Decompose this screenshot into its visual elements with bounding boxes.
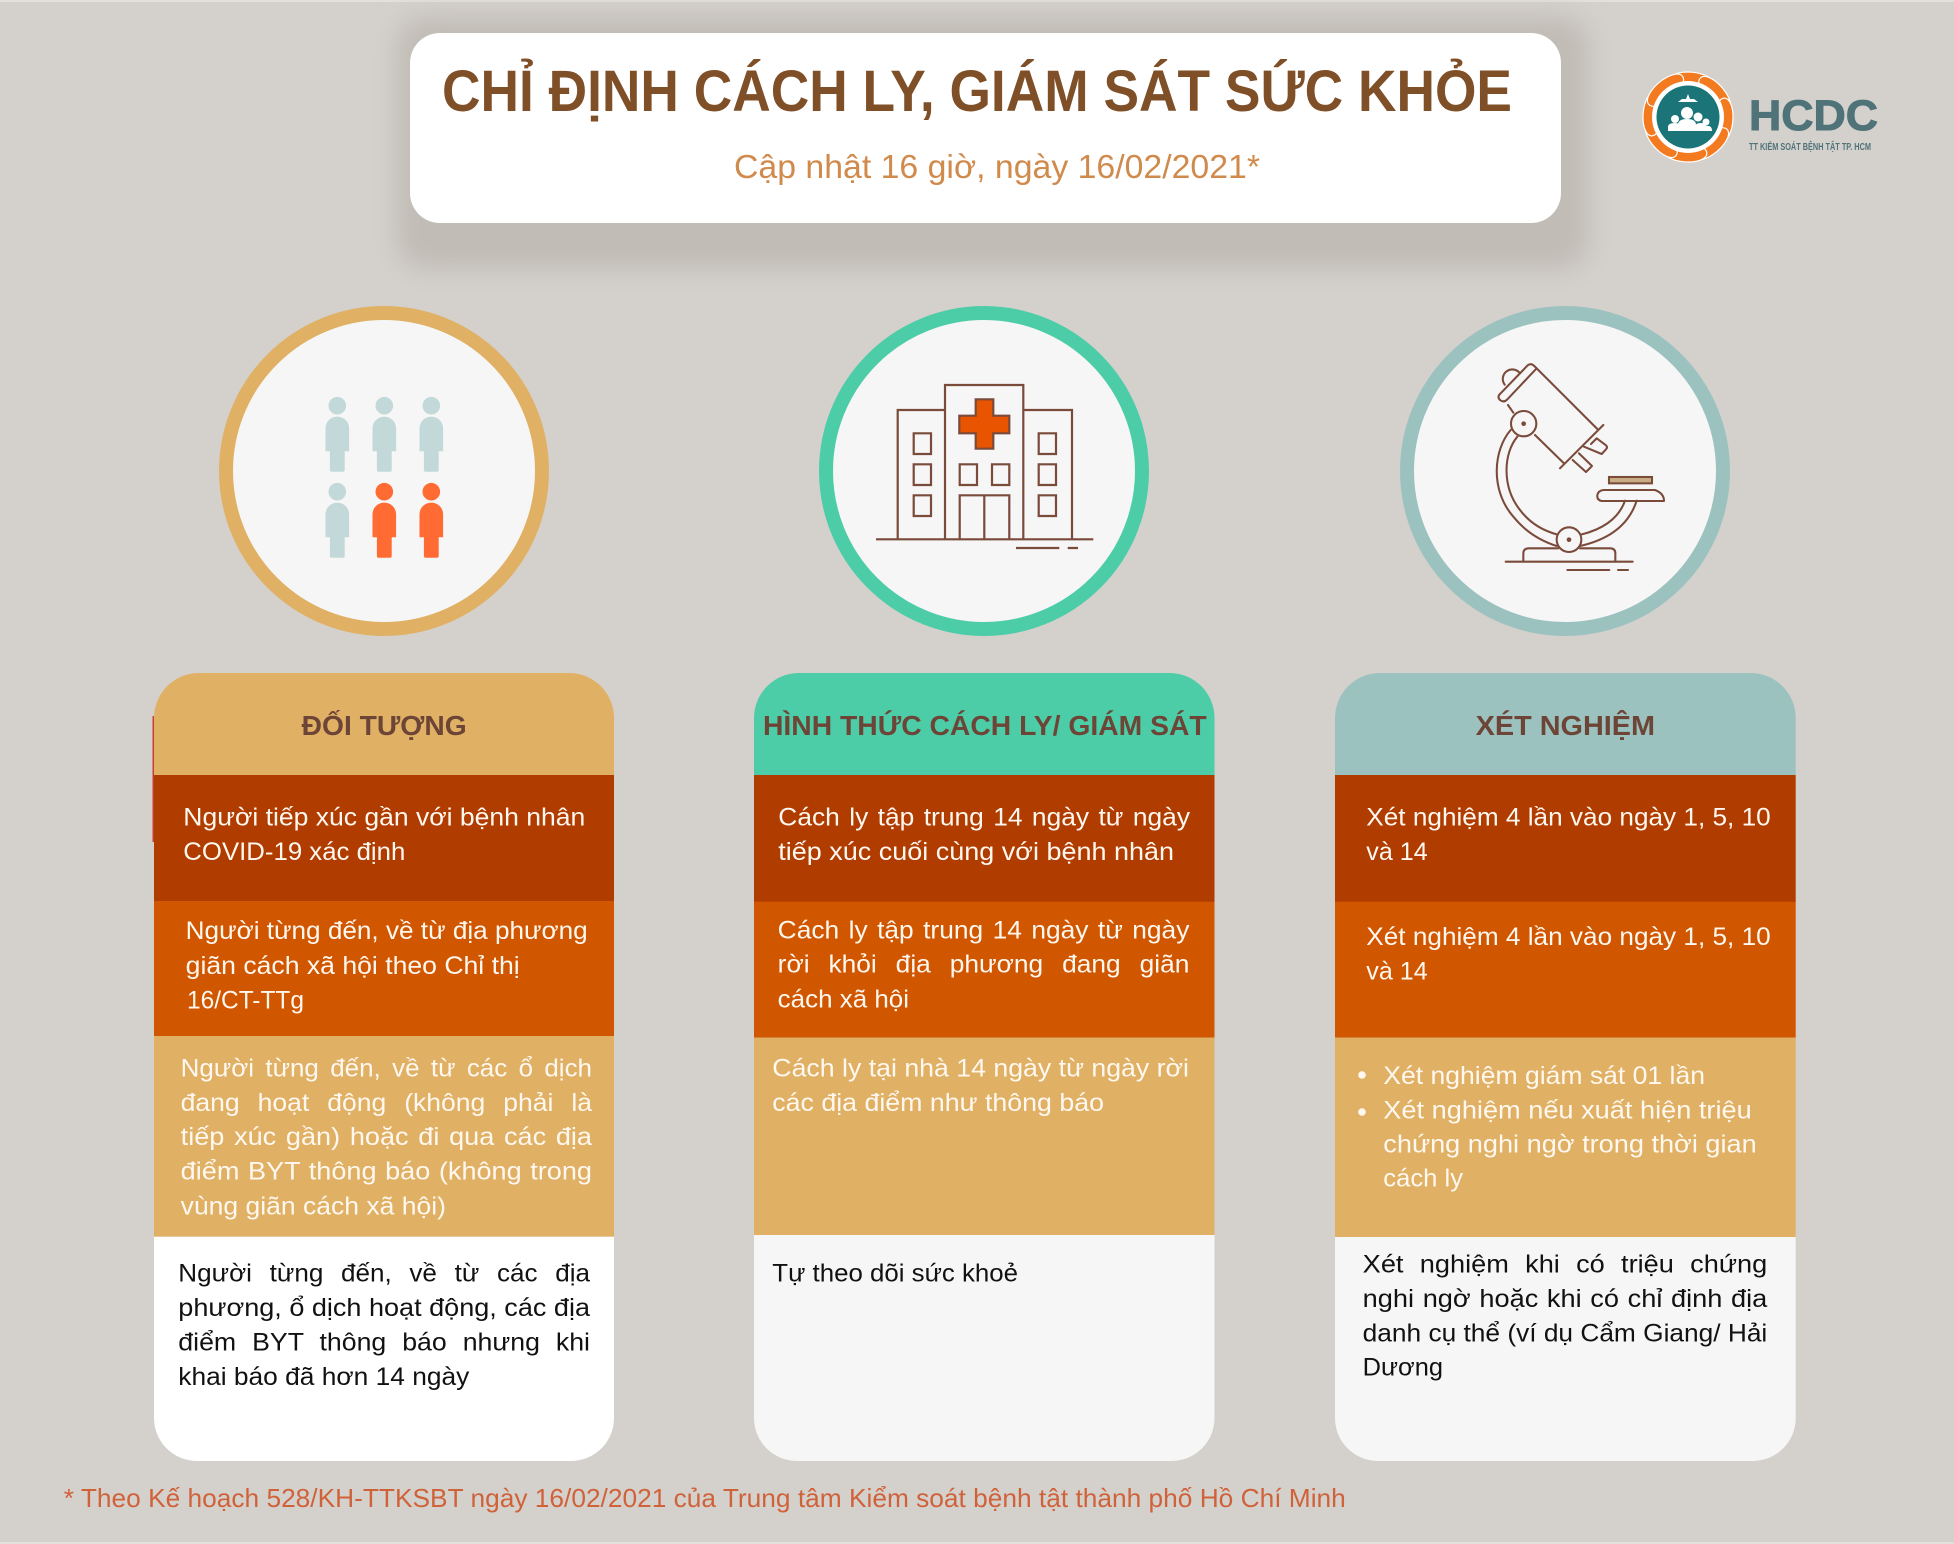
panel: đối tượng: [152, 673, 614, 1461]
header: đối tượng: [154, 673, 614, 775]
header: xét nghiệm: XÉT NGHIỆM: [1476, 710, 1655, 741]
row 1: Cách ly tập trung 14 ngày từ ngày: [778, 804, 1191, 832]
header: hình thức: HÌNH THỨC CÁCH LY/ GIÁM SÁT: [763, 710, 1207, 741]
header: hình thức: [754, 673, 1214, 775]
row 2: 16/CT-TTg: [187, 986, 304, 1014]
logo: HCDC: [1639, 68, 1878, 166]
row 3: đang hoạt động (không phải là: [181, 1089, 592, 1117]
row 4: [1335, 1237, 1796, 1461]
logo: HCDC: HCDC: [1749, 92, 1878, 140]
icon: microscope: [1407, 313, 1723, 629]
row 2: giãn cách xã hội theo Chỉ thị: [186, 952, 520, 980]
row 1: COVID-19 xác định: [183, 838, 405, 866]
row 4: Người từng đến, về từ các địa: [178, 1260, 590, 1288]
footnote: * Theo Kế hoạch 528/KH-TTKSBT ngày 16/02/2021 của Trung tâm Kiểm soát bệnh tật thành phố Hồ Chí Minh: [64, 1483, 1346, 1513]
header: xét nghiệm: [1335, 673, 1796, 775]
title card: [396, 16, 1590, 270]
row 4: phương, ổ dịch hoạt động, các địa: [178, 1294, 590, 1322]
row 1: tiếp xúc cuối cùng với bệnh nhân: [778, 838, 1174, 866]
row 3: Cách ly tại nhà 14 ngày từ ngày rời: [772, 1055, 1189, 1083]
row 2: Cách ly tập trung 14 ngày từ ngày: [778, 916, 1190, 944]
subtitle: Cập nhật 16 giờ, ngày 16/02/2021*: [734, 148, 1260, 185]
header: đối tượng: ĐỐI TƯỢNG: [302, 709, 467, 741]
row 3: [754, 1038, 1214, 1235]
row 2: [154, 901, 614, 1036]
row 2: [1335, 902, 1796, 1038]
row 1: [754, 775, 1214, 902]
row 3: Người từng đến, về từ các ổ dịch: [181, 1055, 592, 1083]
row 3: [154, 1036, 614, 1237]
row 4: Tự theo dõi sức khoẻ: [772, 1260, 1018, 1288]
row 4: nghi ngờ hoặc khi có chỉ định địa: [1363, 1285, 1767, 1313]
row 3: cách ly: [1383, 1165, 1464, 1193]
row 3: vùng giãn cách xã hội): [181, 1192, 446, 1220]
panel: xét nghiệm: [1335, 673, 1796, 1461]
icon: people group: [226, 313, 542, 629]
row 3: chứng nghi ngờ trong thời gian: [1383, 1131, 1757, 1159]
row 1: và 14: [1366, 838, 1428, 866]
row 4: điểm BYT thông báo nhưng khi: [178, 1329, 590, 1357]
row 1: Người tiếp xúc gần với bệnh nhân: [183, 804, 585, 832]
row 3: tiếp xúc gần) hoặc đi qua các địa: [181, 1123, 592, 1151]
row 2: và 14: [1366, 957, 1428, 985]
row 3: các địa điểm như thông báo: [772, 1089, 1104, 1117]
row 3: Xét nghiệm giám sát 01 lần: [1383, 1062, 1705, 1090]
row 1: Xét nghiệm 4 lần vào ngày 1, 5, 10: [1366, 804, 1771, 832]
row 4: danh cụ thể (ví dụ Cẩm Giang/ Hải: [1363, 1319, 1767, 1347]
row 3: Xét nghiệm nếu xuất hiện triệu: [1383, 1096, 1752, 1124]
row 4: khai báo đã hơn 14 ngày: [178, 1363, 470, 1391]
row 4: Dương: [1363, 1354, 1443, 1382]
row 2: [754, 902, 1214, 1038]
logo: HCDC: TT KIỂM SOÁT BỆNH TẬT TP. HCM: [1749, 140, 1871, 153]
row 4: [754, 1235, 1214, 1461]
row 1: [1335, 775, 1796, 902]
row 3: điểm BYT thông báo (không trong: [181, 1158, 592, 1186]
row 2: cách xã hội: [778, 985, 909, 1013]
row 2: Người từng đến, về từ địa phương: [186, 917, 588, 945]
row 3: [1335, 1038, 1796, 1237]
row 2: Xét nghiệm 4 lần vào ngày 1, 5, 10: [1366, 923, 1771, 951]
row 4: [154, 1237, 614, 1461]
row 4: Xét nghiệm khi có triệu chứng: [1363, 1251, 1767, 1279]
icon: hospital: [826, 313, 1142, 629]
row 2: rời khỏi địa phương đang giãn: [778, 951, 1189, 979]
row 1: [154, 775, 614, 901]
title: CHỈ ĐỊNH CÁCH LY, GIÁM SÁT SỨC KHỎE: [442, 59, 1512, 124]
panel: hình thức cách ly: [754, 673, 1214, 1461]
